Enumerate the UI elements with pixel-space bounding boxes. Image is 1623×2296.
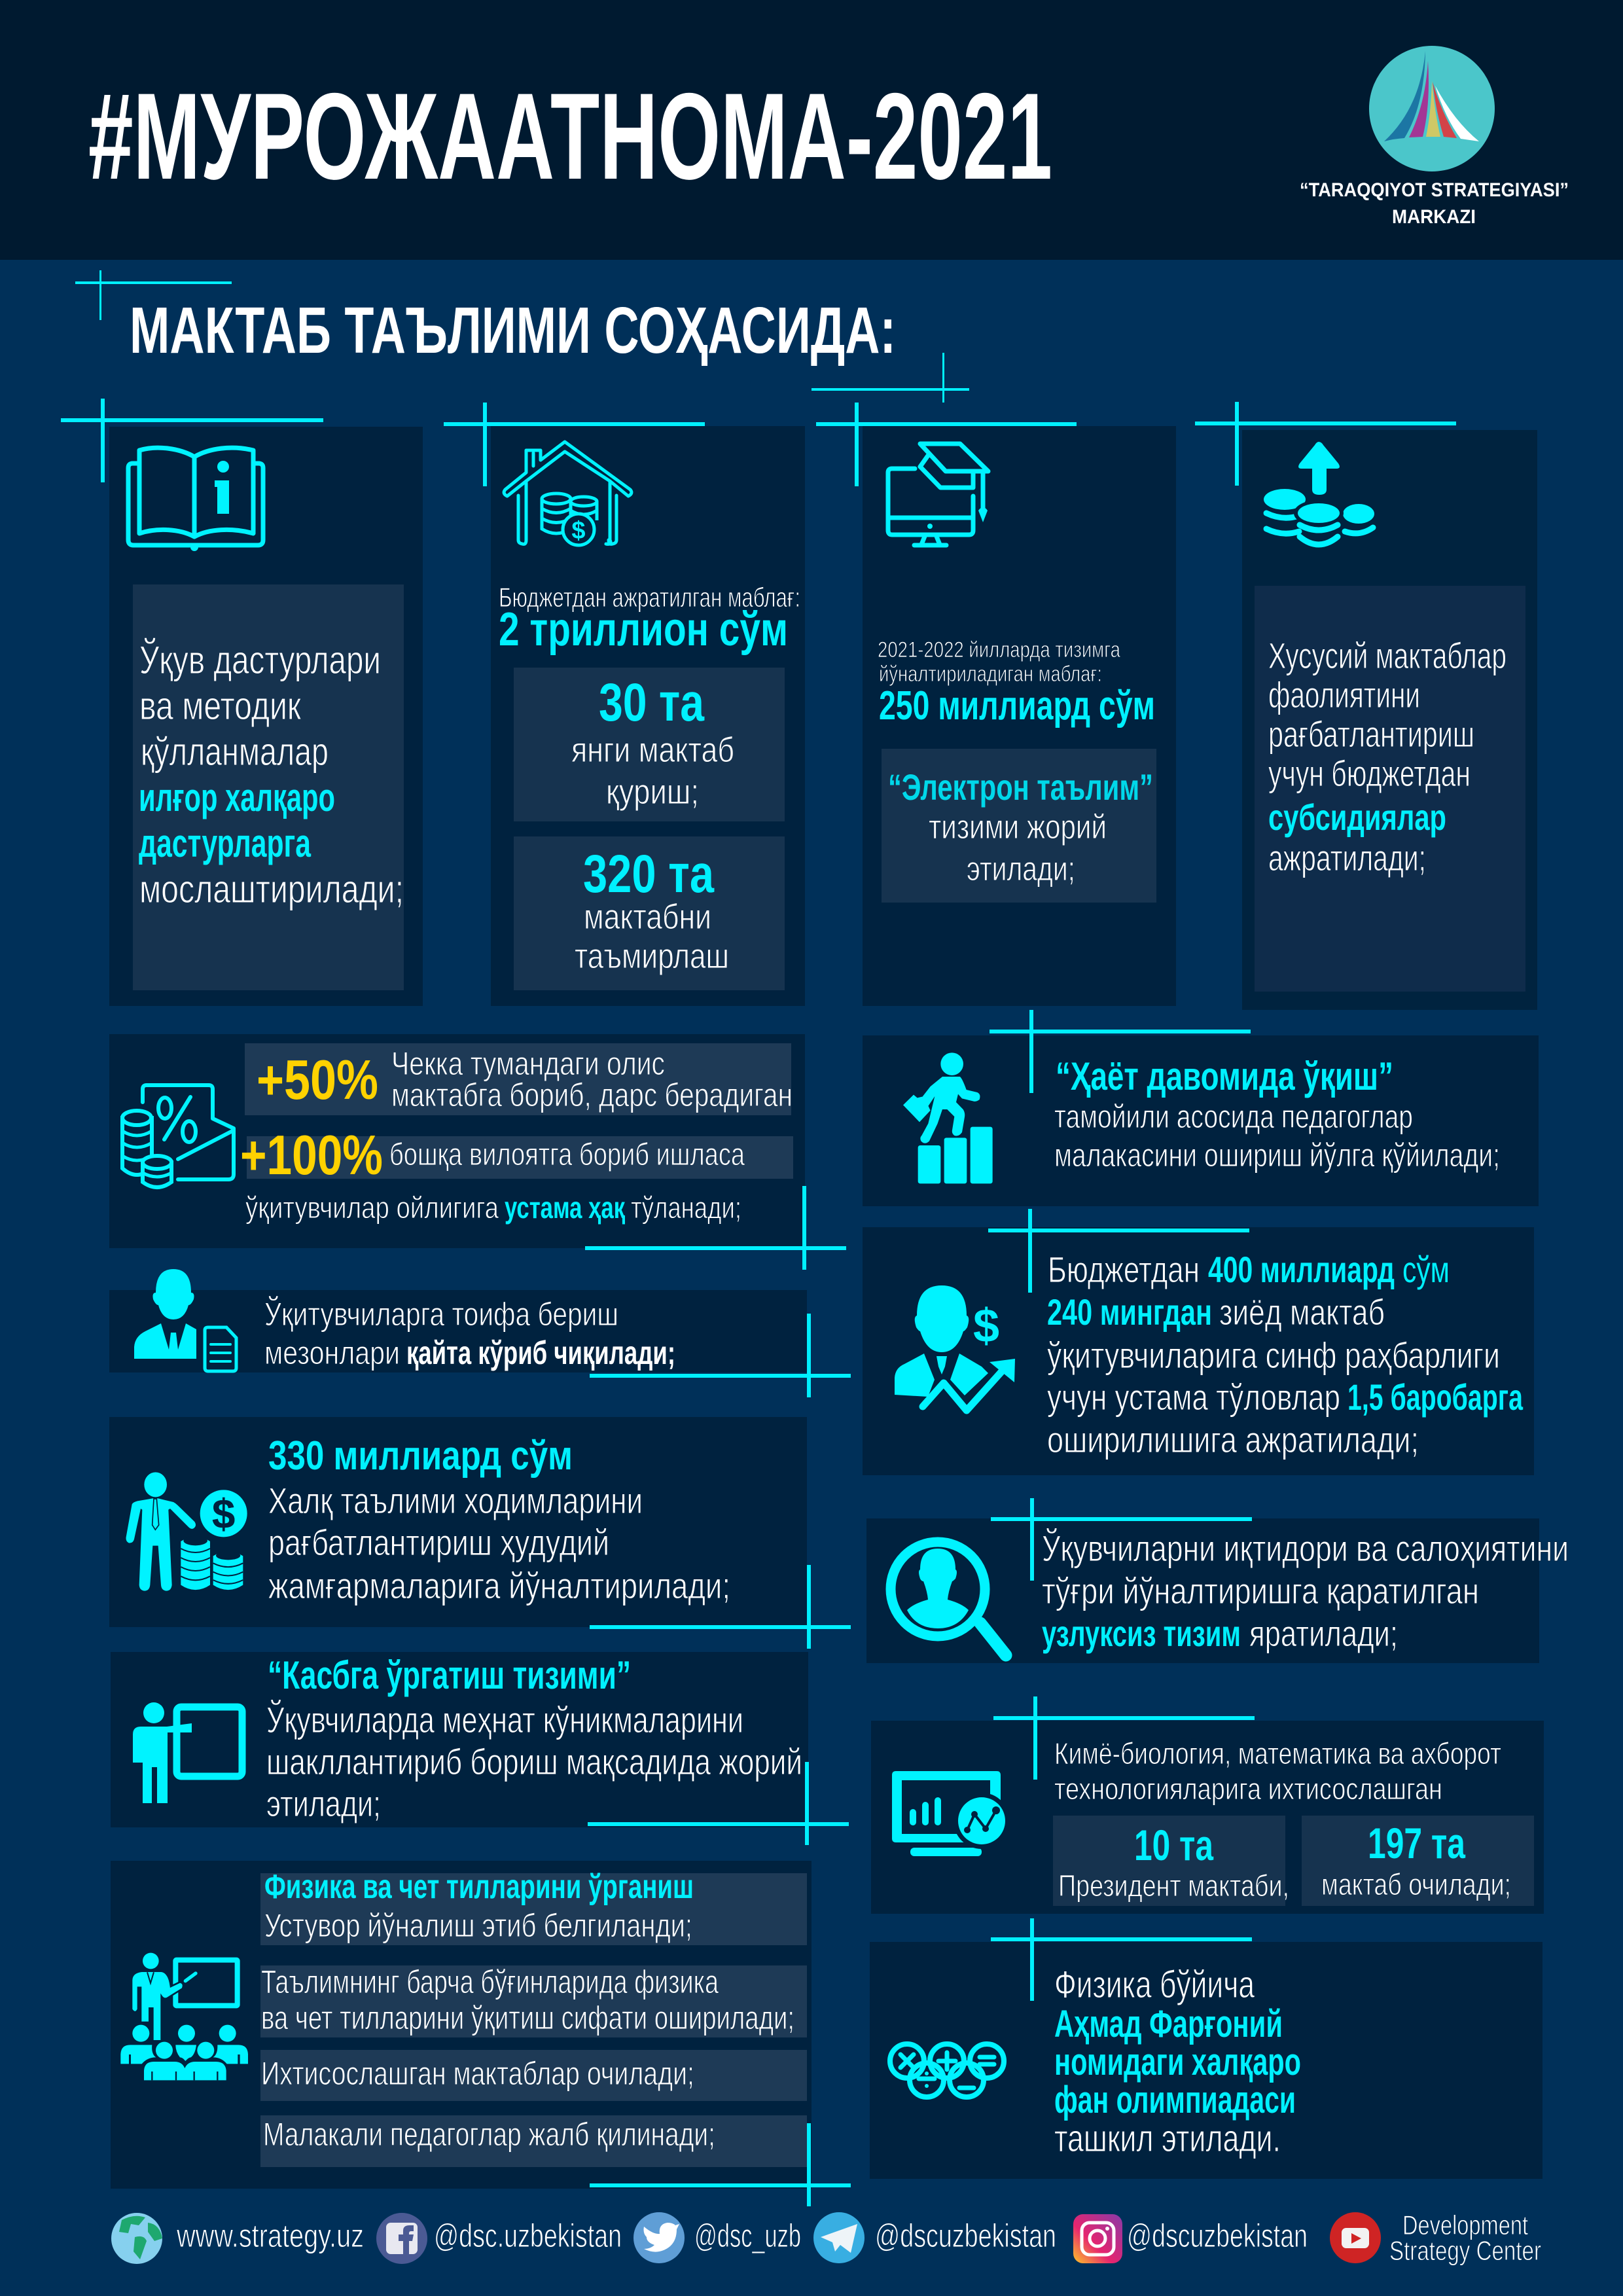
twitter handle: @dsc_uzb (694, 2217, 801, 2254)
icon: instagram (1073, 2214, 1122, 2263)
text block: фан олимпиадаси (1054, 2079, 1296, 2121)
panel: 330 billion (109, 1417, 807, 1627)
text block: ва методик (139, 684, 302, 728)
text block: “Касбга ўргатиш тизими” (268, 1653, 631, 1697)
text block: этилади; (266, 1783, 381, 1824)
text block: мослаштирилади; (139, 867, 404, 911)
section heading: МАКТАБ ТАЪЛИМИ СОҲАСИДА: (130, 294, 896, 367)
bonus +100%: бошқа вилоятга бориб ишласа (389, 1138, 745, 1172)
stat: 30 new schools: янги мактаб (571, 730, 734, 770)
bullet: qualified teachers: Малакали педагоглар жалб қилинади; (263, 2116, 715, 2153)
bullet: qualified teachers (260, 2115, 807, 2167)
icon: walker on bars (903, 1052, 993, 1183)
icon: globe (111, 2213, 162, 2264)
budget amount (499, 582, 800, 656)
icon: book (128, 448, 263, 551)
panel: teacher categories (109, 1269, 807, 1372)
icon: percent envelope with coins (122, 1085, 234, 1187)
telegram handle: @dscuzbekistan (875, 2217, 1056, 2254)
text block: малакасини ошириш йўлга қўйилади; (1054, 1137, 1500, 1174)
panel: olympiad (870, 1942, 1543, 2179)
text block: қайта кўриб чиқилади; (406, 1335, 675, 1371)
bullet: teaching quality (260, 1964, 807, 2037)
bonus +50%: мактабга бориб, дарс берадиган (391, 1077, 793, 1113)
funding text: 250 миллиард сўм (879, 683, 1155, 728)
bonus note: ўқитувчилар ойлигига (245, 1191, 499, 1225)
stat: 320 schools repaired: таъмирлаш (575, 937, 729, 976)
text block (1054, 1964, 1301, 2160)
bullet: priority: Устувор йўналиш этиб белгиланди; (264, 1907, 692, 1944)
callout: electronic education: этилади; (967, 850, 1075, 888)
stat: 320 schools repaired (514, 836, 785, 990)
bullet: specialised schools: Ихтисослашган мактаблар очилади; (261, 2055, 694, 2092)
icon: youtube (1330, 2212, 1381, 2263)
icon: person with document (134, 1269, 236, 1371)
stat: 197 schools: 197 та (1368, 1819, 1466, 1867)
bonus +50% (257, 1045, 793, 1113)
text block: Халқ таълими ходимларини (268, 1480, 643, 1521)
text block: Бюджетдан (1048, 1249, 1200, 1290)
stat: 10 president schools: Президент мактаби, (1058, 1869, 1289, 1903)
text block: Физика бўйича (1054, 1964, 1255, 2006)
budget amount: Бюджетдан ажратилган маблағ: (499, 582, 800, 613)
stat: 30 new schools: 30 та (599, 673, 705, 732)
panel: class leadership pay (863, 1227, 1534, 1475)
text block: фаолиятини (1268, 674, 1420, 715)
icon: chart monitor (892, 1771, 1010, 1856)
funding text: 2021-2022 йилларда тизимга (878, 637, 1120, 662)
panel: president schools (871, 1721, 1544, 1914)
panel: physics and languages (111, 1861, 812, 2189)
icon: monitor with graduation cap (888, 444, 988, 545)
text block: шакллантириб бориш мақсадида жорий (266, 1741, 802, 1782)
footer: social links (111, 2210, 1541, 2266)
text block: Аҳмад Фарғоний (1054, 2003, 1283, 2045)
text block: “Ҳаёт давомида ўқиш” (1056, 1054, 1393, 1098)
icon: twitter (633, 2212, 685, 2263)
bullet: teaching quality: Таълимнинг барча бўғинларида физика (261, 1964, 719, 2000)
bonus +100% (240, 1124, 745, 1187)
icon: teacher at board (133, 1702, 242, 1803)
funding text (878, 637, 1155, 728)
stat: 30 new schools: қуриш; (606, 772, 699, 812)
text block: 400 миллиард (1208, 1249, 1395, 1290)
icon: man with dollar and coins (126, 1472, 247, 1591)
text block: тўғри йўналтиришга қаратилган (1042, 1570, 1479, 1611)
text block: технологияларига ихтисослашган (1054, 1772, 1442, 1806)
panel: budget (491, 426, 805, 1006)
icon: magnifier with person (891, 1542, 1006, 1655)
text block: рағбатлантириш (1268, 713, 1474, 755)
icon: classroom (120, 1953, 248, 2080)
bonus +50%: +50% (257, 1049, 378, 1111)
bullet: teaching quality: ва чет тилларини ўқитиш сифати оширилади; (261, 2000, 794, 2036)
text block: узлуксиз тизим (1042, 1613, 1241, 1654)
text block: жамғармаларига йўналтирилади; (268, 1565, 730, 1606)
text block: Ўқув дастурлари (139, 638, 381, 682)
funding text: йўналтириладиган маблағ: (879, 662, 1102, 687)
text block (1054, 1736, 1501, 1806)
text block (1268, 635, 1507, 878)
text block: Ўқитувчиларга тоифа бериш (264, 1295, 618, 1333)
icon: facebook (376, 2213, 427, 2264)
text block: яратилади; (1249, 1613, 1398, 1654)
text block: мезонлари (264, 1335, 400, 1371)
text block: ўқитувчиларига синф раҳбарлиги (1047, 1335, 1500, 1376)
stat: 30 new schools (514, 668, 785, 821)
organisation name: Strategy Center (1389, 2235, 1541, 2266)
text block: зиёд мактаб (1219, 1291, 1385, 1333)
text block: қўлланмалар (141, 730, 329, 774)
bonus +50%: Чекка тумандаги олис (391, 1045, 665, 1082)
text block (1047, 1249, 1524, 1460)
text block: Хусусий мактаблар (1268, 635, 1507, 676)
icon: man with dollar and coins: $ (212, 1492, 235, 1537)
text block (264, 1295, 675, 1371)
stat: 10 president schools: 10 та (1134, 1821, 1214, 1869)
organisation name (1389, 2210, 1541, 2266)
panel: private schools (1242, 430, 1537, 1010)
bonus note (245, 1191, 741, 1225)
icon: house with coins (504, 442, 632, 545)
icon: telegram (813, 2212, 865, 2263)
header band (0, 0, 1623, 260)
budget amount: 2 триллион сўм (499, 603, 788, 656)
icon: house with coins: $ (571, 517, 586, 545)
icon: coins with arrow (1264, 442, 1374, 545)
title: #МУРОЖААТНОМА-2021 (88, 67, 1052, 205)
panel: vocational training (111, 1652, 808, 1827)
callout: electronic education (882, 749, 1156, 903)
text block (139, 638, 404, 911)
text block: Кимё-биология, математика ва ахборот (1054, 1736, 1501, 1770)
icon: person with rising arrow (895, 1285, 1015, 1410)
bonus +100%: +100% (240, 1124, 383, 1187)
logo caption (1300, 179, 1569, 228)
text block: ажратилади; (1268, 837, 1426, 878)
website: www.strategy.uz (176, 2217, 364, 2254)
panel: e-learning (863, 426, 1176, 1006)
panel: lifelong learning (863, 1035, 1539, 1206)
logo caption: “TARAQQIYOT STRATEGIYASI” (1300, 179, 1569, 201)
text block: Ўқувчиларда меҳнат кўникмаларини (266, 1699, 743, 1740)
text block: оширилишига ажратилади; (1047, 1419, 1419, 1460)
bullet: priority: Физика ва чет тилларини ўрганиш (264, 1868, 694, 1906)
text block: субсидиялар (1268, 797, 1446, 838)
callout: electronic education: “Электрон таълим” (888, 766, 1153, 808)
instagram handle: @dscuzbekistan (1127, 2217, 1308, 2254)
panel: talent system (866, 1518, 1569, 1663)
facebook handle: @dsc.uzbekistan (434, 2217, 622, 2254)
stat: 10 president schools (1053, 1816, 1289, 1906)
text block: 330 миллиард сўм (268, 1433, 573, 1479)
text block: ташкил этилади. (1054, 2117, 1281, 2160)
panel: curriculum (109, 427, 423, 1006)
text block (1054, 1054, 1500, 1174)
stat: 320 schools repaired: мактабни (584, 897, 711, 937)
text block: рағбатлантириш ҳудудий (268, 1522, 609, 1563)
panel: teacher bonus (109, 1034, 805, 1248)
text block: 240 мингдан (1047, 1291, 1212, 1333)
text block: илғор халқаро (139, 776, 335, 819)
bonus note: устама ҳақ (505, 1191, 626, 1225)
text block: дастурларга (139, 821, 311, 865)
text block (1042, 1528, 1569, 1654)
text block: учун устама тўловлар (1047, 1376, 1340, 1418)
logo caption: MARKAZI (1392, 206, 1476, 228)
icon: person with rising arrow: $ (973, 1300, 999, 1352)
text block (266, 1653, 802, 1824)
text block: тамойили асосида педагоглар (1054, 1098, 1413, 1135)
logo (1369, 46, 1495, 171)
bullet: priority (260, 1868, 807, 1945)
bonus note: тўланади; (631, 1191, 741, 1225)
organisation name: Development (1402, 2210, 1528, 2240)
stat: 197 schools: мактаб очилади; (1321, 1867, 1511, 1901)
stat: 320 schools repaired: 320 та (583, 844, 715, 904)
text block: номидаги халқаро (1054, 2041, 1301, 2083)
callout: electronic education: тизими жорий (929, 808, 1107, 846)
text block (268, 1433, 730, 1606)
icon: math rings (890, 2044, 1004, 2097)
stat: 197 schools (1302, 1816, 1534, 1906)
text block: учун бюджетдан (1268, 753, 1471, 794)
text block: сўм (1402, 1249, 1450, 1290)
text block: 1,5 баробарга (1347, 1376, 1524, 1418)
